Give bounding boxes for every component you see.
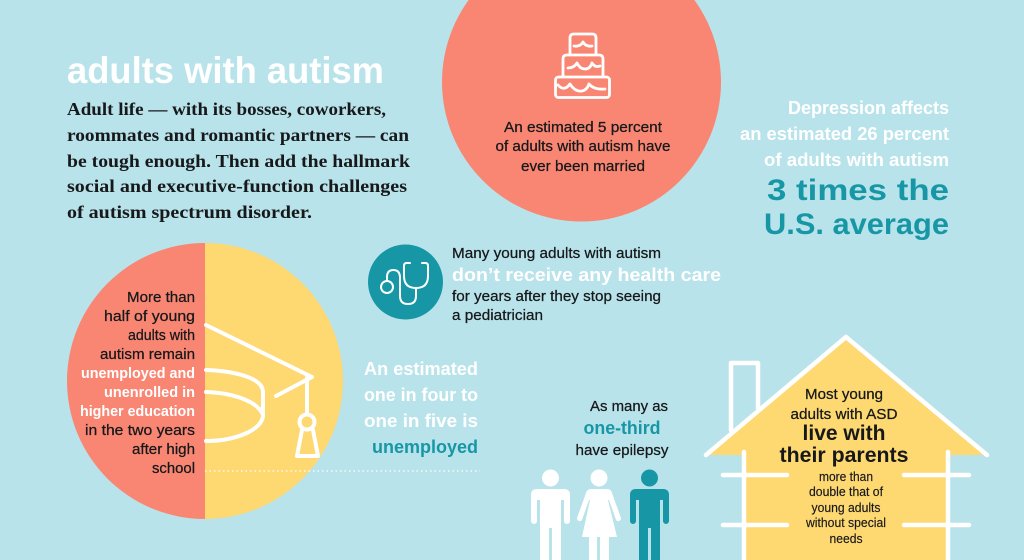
unemployment statistic: one in five is bbox=[364, 411, 478, 431]
depression statistic bbox=[740, 98, 949, 241]
icon: wedding cake bbox=[556, 34, 610, 98]
house text: needs bbox=[830, 532, 862, 546]
intro text block bbox=[67, 99, 410, 222]
unemployment text: unemployed and bbox=[81, 366, 195, 382]
depression statistic: Depression affects bbox=[788, 98, 949, 118]
unemployment text bbox=[80, 290, 195, 477]
unemployment text: school bbox=[152, 461, 195, 477]
panel: unemployment pie circle bbox=[67, 243, 343, 519]
house text: adults with ASD bbox=[790, 407, 898, 423]
intro text block: Adult life — with its bosses, coworkers, bbox=[67, 99, 386, 119]
epilepsy text: have epilepsy bbox=[576, 443, 669, 459]
marriage text: An estimated 5 percent bbox=[504, 120, 662, 136]
house outline bbox=[706, 337, 987, 560]
health care text: a pediatrician bbox=[452, 308, 543, 324]
panel: house bbox=[706, 337, 987, 560]
person: woman bbox=[577, 470, 621, 560]
intro text block: be tough enough. Then add the hallmark bbox=[67, 151, 410, 171]
unemployment text: autism remain bbox=[100, 347, 195, 363]
unemployment statistic bbox=[364, 359, 478, 457]
health care text: Many young adults with autism bbox=[452, 246, 661, 262]
house text: young adults bbox=[812, 501, 880, 515]
unemployment statistic: unemployed bbox=[372, 437, 478, 457]
unemployment statistic: one in four to bbox=[364, 385, 478, 405]
house text: live with bbox=[802, 421, 886, 445]
unemployment text: in the two years bbox=[85, 423, 195, 439]
house text: their parents bbox=[780, 443, 909, 467]
unemployment text: adults with bbox=[128, 328, 195, 344]
health care text bbox=[452, 246, 721, 324]
health care text: for years after they stop seeing bbox=[452, 289, 661, 305]
icon: graduation cap bbox=[206, 325, 318, 456]
depression statistic: 3 times the bbox=[767, 174, 949, 207]
unemployment text: More than bbox=[127, 290, 195, 306]
epilepsy text: one-third bbox=[584, 418, 660, 438]
unemployment text: after high bbox=[132, 442, 195, 458]
person: man bbox=[531, 470, 570, 560]
person: teal man bbox=[630, 470, 669, 560]
panel: marriage circle bbox=[442, 0, 721, 222]
epilepsy text bbox=[576, 399, 669, 459]
panel: stethoscope health care bbox=[368, 244, 721, 324]
intro text block: roommates and romantic partners — can bbox=[67, 125, 409, 145]
health care text: don’t receive any health care bbox=[452, 265, 721, 285]
depression statistic: of adults with autism bbox=[764, 150, 949, 170]
unemployment text: half of young bbox=[104, 309, 195, 325]
icon: three people bbox=[531, 470, 669, 560]
unemployment text: unenrolled in bbox=[104, 385, 195, 401]
house text bbox=[780, 387, 909, 546]
house text: more than bbox=[819, 470, 873, 484]
marriage text bbox=[496, 120, 670, 175]
marriage text: ever been married bbox=[521, 159, 645, 175]
house text: double that of bbox=[809, 485, 884, 499]
intro text block: of autism spectrum disorder. bbox=[67, 202, 312, 222]
unemployment text: higher education bbox=[80, 404, 195, 420]
title: adults with autism bbox=[67, 50, 384, 91]
depression statistic: an estimated 26 percent bbox=[740, 124, 949, 144]
house text: Most young bbox=[805, 387, 883, 403]
unemployment statistic: An estimated bbox=[364, 359, 478, 379]
icon: stethoscope bbox=[368, 244, 443, 320]
epilepsy text: As many as bbox=[590, 399, 668, 415]
marriage text: of adults with autism have bbox=[496, 139, 670, 155]
depression statistic: U.S. average bbox=[764, 208, 949, 241]
intro text block: social and executive-function challenges bbox=[67, 176, 407, 196]
house text: without special bbox=[805, 516, 886, 530]
